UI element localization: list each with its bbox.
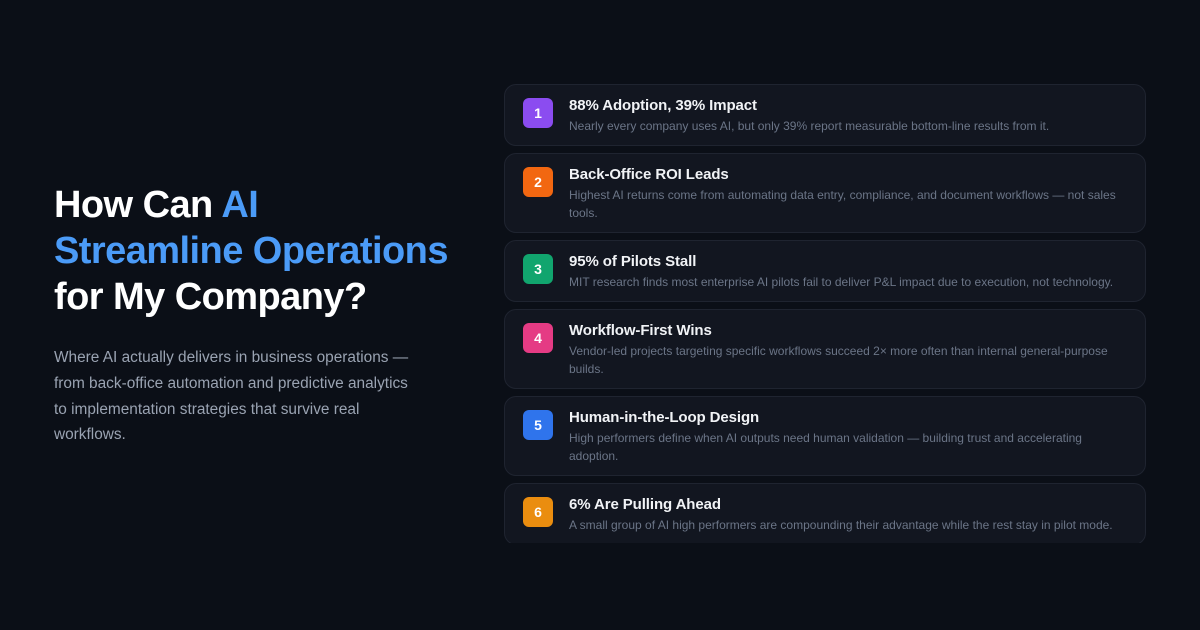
card 2: 2 [534, 174, 542, 190]
card 6: 6 [534, 504, 542, 520]
card 6 [504, 483, 1146, 545]
card 1 [504, 84, 1146, 146]
title [54, 184, 448, 318]
card 3: MIT research finds most enterprise AI pilots fail to deliver P&L impact due to execution, not technology. [569, 275, 1113, 289]
card 6: 6% Are Pulling Ahead [569, 496, 721, 513]
card 1: 88% Adoption, 39% Impact [569, 97, 757, 114]
card 5: 5 [534, 417, 542, 433]
card 3: 3 [534, 261, 542, 277]
title: How Can AI [54, 184, 258, 226]
card 4: 4 [534, 330, 542, 346]
card 4: Vendor-led projects targeting specific workflows succeed 2× more often than internal general-purpose builds. [569, 344, 1108, 376]
card 2: Highest AI returns come from automating data entry, compliance, and document workflows — not sales tools. [569, 188, 1116, 220]
card 5 [504, 396, 1146, 476]
card 2: Back-Office ROI Leads [569, 166, 729, 183]
card 3: 95% of Pilots Stall [569, 253, 696, 270]
title: for My Company? [54, 276, 367, 318]
card 4: Workflow-First Wins [569, 322, 712, 339]
list of findings [504, 84, 1146, 543]
card 5: Human-in-the-Loop Design [569, 409, 759, 426]
card 4 [504, 309, 1146, 389]
card 6: A small group of AI high performers are compounding their advantage while the rest stay in pilot mode. [569, 518, 1113, 532]
card 1: 1 [534, 105, 542, 121]
intro text: Where AI actually delivers in business operations — from back-office automation and predictive analytics to implementation strategies that survive real workflows. [54, 349, 408, 443]
card 3 [504, 240, 1146, 302]
card 1: Nearly every company uses AI, but only 39% report measurable bottom-line results from it. [569, 119, 1049, 133]
card 2 [504, 153, 1146, 233]
title: Streamline Operations [54, 230, 448, 272]
card 5: High performers define when AI outputs need human validation — building trust and accelerating adoption. [569, 431, 1082, 463]
